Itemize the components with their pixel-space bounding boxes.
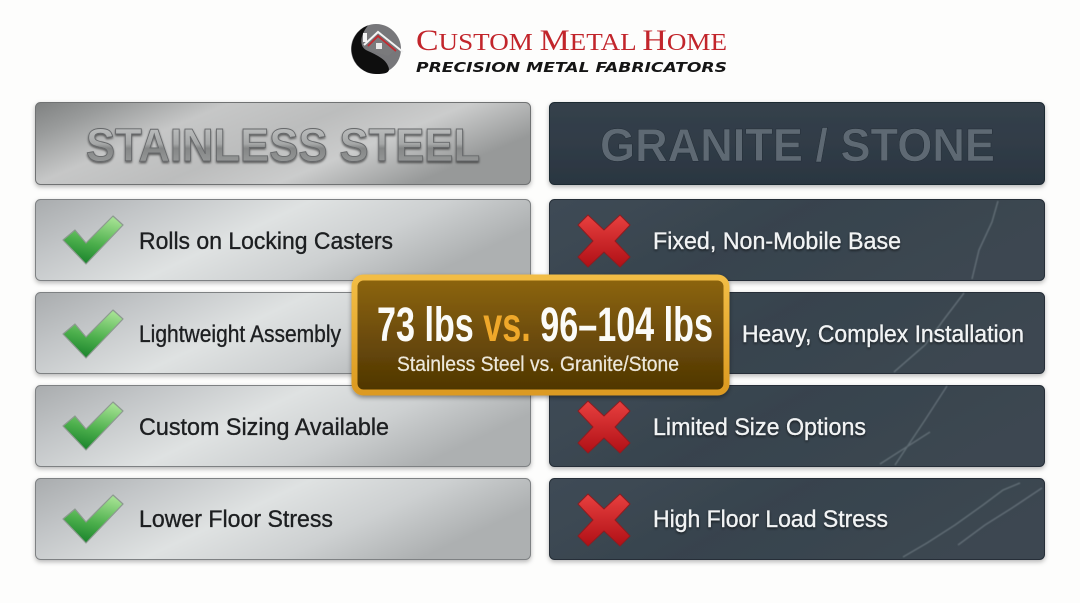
panel: granite stone column (550, 102, 1044, 560)
row: limited size options: Limited Size Options (653, 414, 866, 441)
heading: stainless steel: STAINLESS STEEL (86, 119, 480, 171)
callout: weight comparison (354, 278, 726, 392)
logo tagline: PRECISION METAL FABRICATORS (416, 61, 727, 76)
logo name: CUSTOM METAL HOME (416, 24, 727, 57)
callout headline: 73 lbs vs. 96–104 lbs (377, 299, 713, 352)
logo emblem (351, 24, 403, 74)
row: lower floor stress (36, 478, 530, 560)
row: heavy, complex installation: Heavy, Complex Installation (742, 321, 1024, 348)
row: high floor load stress (550, 478, 1044, 560)
panel: stainless steel column (36, 102, 530, 560)
logo (351, 24, 727, 76)
callout subtitle: Stainless Steel vs. Granite/Stone (397, 353, 679, 376)
row: lightweight assembly: Lightweight Assembly (139, 321, 341, 348)
row: lightweight assembly (36, 292, 530, 374)
row: lower floor stress: Lower Floor Stress (139, 506, 333, 533)
row: high floor load stress: High Floor Load Stress (653, 506, 888, 533)
row: custom sizing available (36, 386, 530, 466)
heading: stainless steel (36, 102, 530, 184)
row: rolls on locking casters (36, 200, 530, 280)
row: rolls on locking casters: Rolls on Locking Casters (139, 228, 393, 255)
heading: granite / stone: GRANITE / STONE (600, 119, 995, 171)
heading: granite / stone (550, 102, 1044, 184)
row: heavy, complex installation (550, 292, 1044, 374)
row: limited size options (550, 386, 1044, 466)
row: custom sizing available: Custom Sizing Available (139, 414, 389, 441)
row: fixed, non-mobile base: Fixed, Non-Mobile Base (653, 228, 901, 255)
row: fixed, non-mobile base (550, 200, 1044, 280)
